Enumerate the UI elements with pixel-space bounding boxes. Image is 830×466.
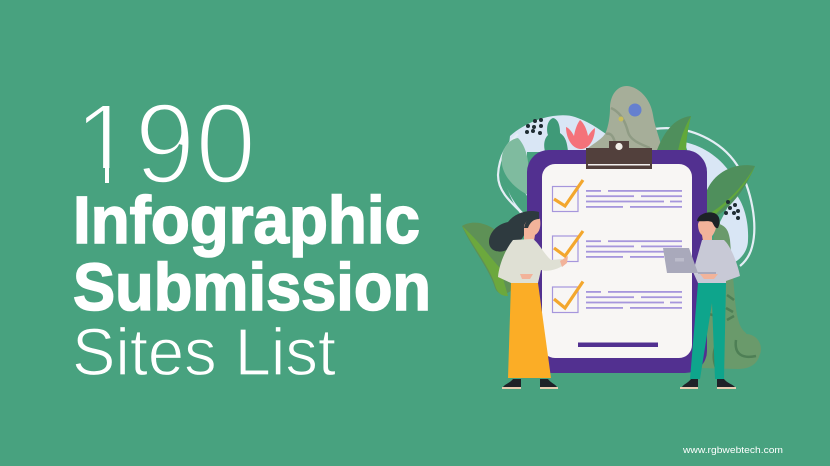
woman hand [560,256,568,267]
checklist item 1 [552,180,682,212]
website watermark: www.rgbwebtech.com [682,445,783,456]
boulder [586,86,662,150]
left bottom leaf [462,223,512,294]
black dots left [525,118,543,135]
clipboard [527,141,707,373]
black dots right [724,200,740,220]
boulder contour lines [606,108,650,150]
woman skirt [508,283,551,378]
background blob right bottom [720,193,748,262]
man hair [697,212,720,228]
dark green leaf [657,116,691,152]
left bottom leaf lime [462,226,508,296]
woman head [524,218,540,241]
woman figure [489,211,568,389]
background blob right top [684,142,731,196]
right leaf [707,165,755,222]
man hand [700,274,718,279]
illustration [462,86,761,389]
green patch under pale leaf [502,170,527,216]
man sweater [693,240,740,283]
woman hair [489,211,539,252]
background blob left [505,115,610,222]
pink tulip [566,120,595,149]
man pants [690,283,726,379]
woman left shoe [502,379,521,389]
pale leaf [502,138,529,195]
clip [586,141,652,169]
woman sweater [498,239,564,283]
title [72,81,431,390]
man right shoe [717,379,736,389]
lime leaf edge [678,116,691,152]
white ring [498,128,754,266]
blue dot [628,104,642,116]
bottom purple bar [578,342,658,347]
title number: 190: 190 [74,81,256,208]
small green plant [544,118,568,151]
right leaf lime edge [707,166,755,222]
title line: Submission: Submission [73,250,431,325]
checklist item 3 [552,282,682,312]
woman hair fringe [524,212,539,228]
checklist item 2 [552,231,682,262]
man figure [663,212,740,389]
man left shoe [680,379,698,389]
right bottom plant [700,222,761,369]
title line: Sites List: Sites List [72,315,336,390]
clipboard board [527,150,707,373]
clipboard paper [542,164,692,358]
man head [698,217,717,241]
yellow dot [618,116,624,122]
title line: Infographic: Infographic [73,183,420,258]
woman right shoe [540,379,558,389]
laptop [663,248,716,274]
